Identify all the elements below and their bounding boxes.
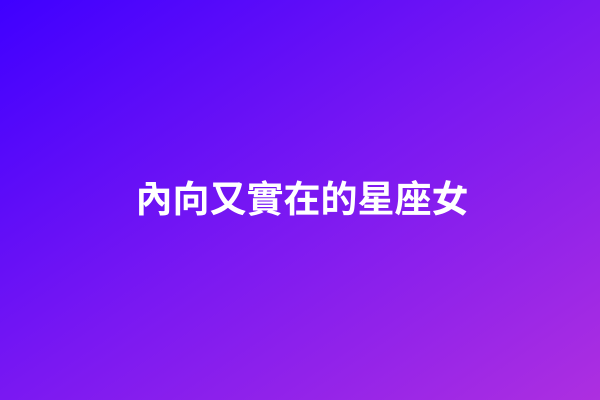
title: 內向又實在的星座女 [136, 179, 468, 220]
